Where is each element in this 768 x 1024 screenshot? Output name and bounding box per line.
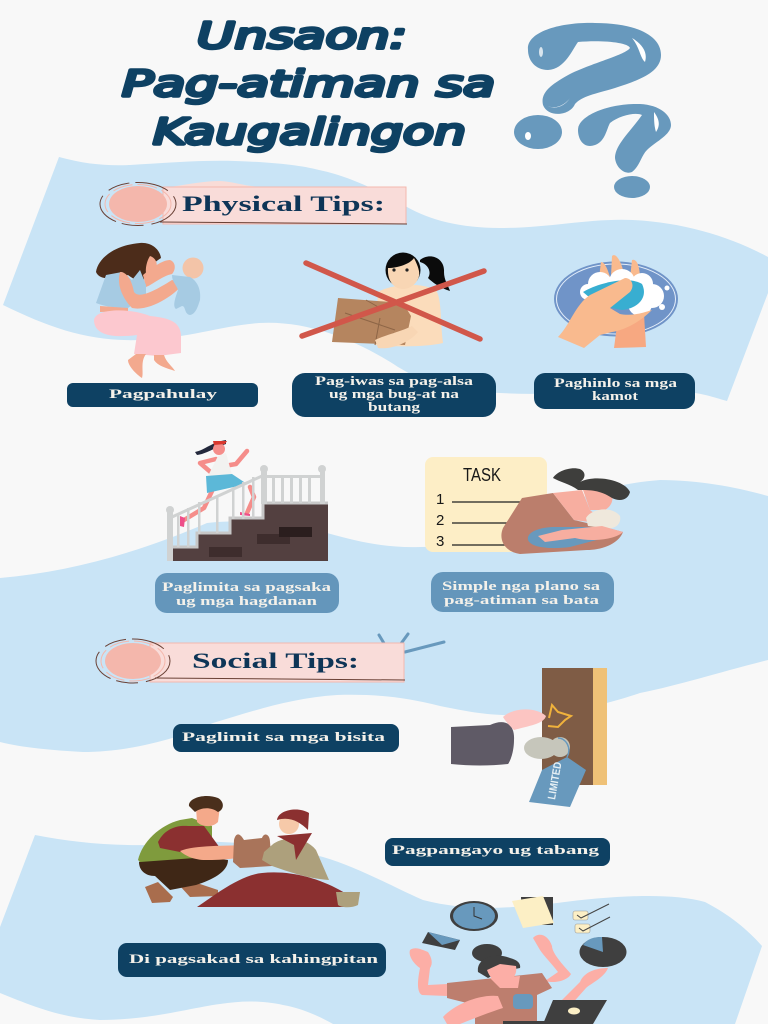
illustration: task list and mother with baby: TASK [463, 465, 501, 485]
background wave: top band [3, 157, 768, 401]
illustration: task list and mother with baby: 1 [436, 491, 444, 508]
label: Pagpangayo ug tabang: Pagpangayo ug tabang [392, 843, 600, 857]
label: Pag-iwas: butang [368, 400, 421, 414]
illustration: task list and mother with baby: 3 [436, 533, 444, 550]
label: Pag-iwas: Pag-iwas sa pag-alsa [315, 374, 474, 388]
label: Simple nga plano: pag-atiman sa bata [444, 593, 600, 607]
title: Kaugalingon [153, 112, 466, 153]
icon: question marks [514, 23, 671, 198]
heading: Social Tips: Social Tips: [192, 648, 359, 673]
label: Pagpahulay [67, 383, 258, 407]
label: Paghinlo [534, 373, 695, 409]
illustration: washing hands [554, 255, 678, 348]
illustration: door with limited tag: LIMITED [546, 761, 565, 801]
background wave: bottom band [0, 835, 762, 1024]
label: Pag-iwas [292, 373, 496, 417]
background wave: middle band [0, 480, 768, 752]
label: Paglimita: Paglimita sa pagsaka [162, 580, 332, 594]
illustration: task list and mother with baby [425, 457, 630, 554]
label: Simple nga plano [431, 572, 614, 612]
title: Pag-atiman sa [122, 64, 495, 105]
icon: spark lines [379, 634, 444, 652]
title [122, 16, 495, 153]
illustration: man handing bag to woman [138, 796, 360, 907]
illustration: multitasking woman [410, 896, 626, 1024]
label: Pagpahulay: Pagpahulay [109, 387, 218, 401]
heading: Physical Tips [100, 181, 407, 226]
label: Simple nga plano: Simple nga plano sa [442, 579, 601, 593]
title: Unsaon: [197, 16, 407, 57]
label: Paghinlo: kamot [592, 389, 639, 403]
illustration: mother resting with baby [94, 243, 204, 378]
label: Paglimita: ug mga hagdanan [176, 594, 317, 608]
illustration: woman climbing stairs [166, 440, 328, 561]
label: Paglimita [155, 573, 339, 613]
heading: Physical Tips: Physical Tips: [182, 191, 385, 216]
label: Di pagsakad sa kahingpitan: Di pagsakad sa kahingpitan [129, 952, 378, 966]
label: Paglimit sa mga bisita [173, 724, 399, 752]
label: Paghinlo: Paghinlo sa mga [554, 376, 678, 390]
label: Di pagsakad sa kahingpitan [118, 943, 386, 977]
icon: red cross [302, 263, 484, 339]
illustration: task list and mother with baby: 2 [436, 512, 444, 529]
label: Pag-iwas: ug mga bug-at na [329, 387, 460, 401]
label: Pagpangayo ug tabang [385, 838, 610, 866]
heading: Social Tips [96, 639, 405, 683]
label: Paglimit sa mga bisita: Paglimit sa mga bisita [182, 730, 386, 744]
illustration: woman carrying boxes crossed out [302, 252, 484, 348]
illustration: door with limited tag [451, 668, 607, 807]
